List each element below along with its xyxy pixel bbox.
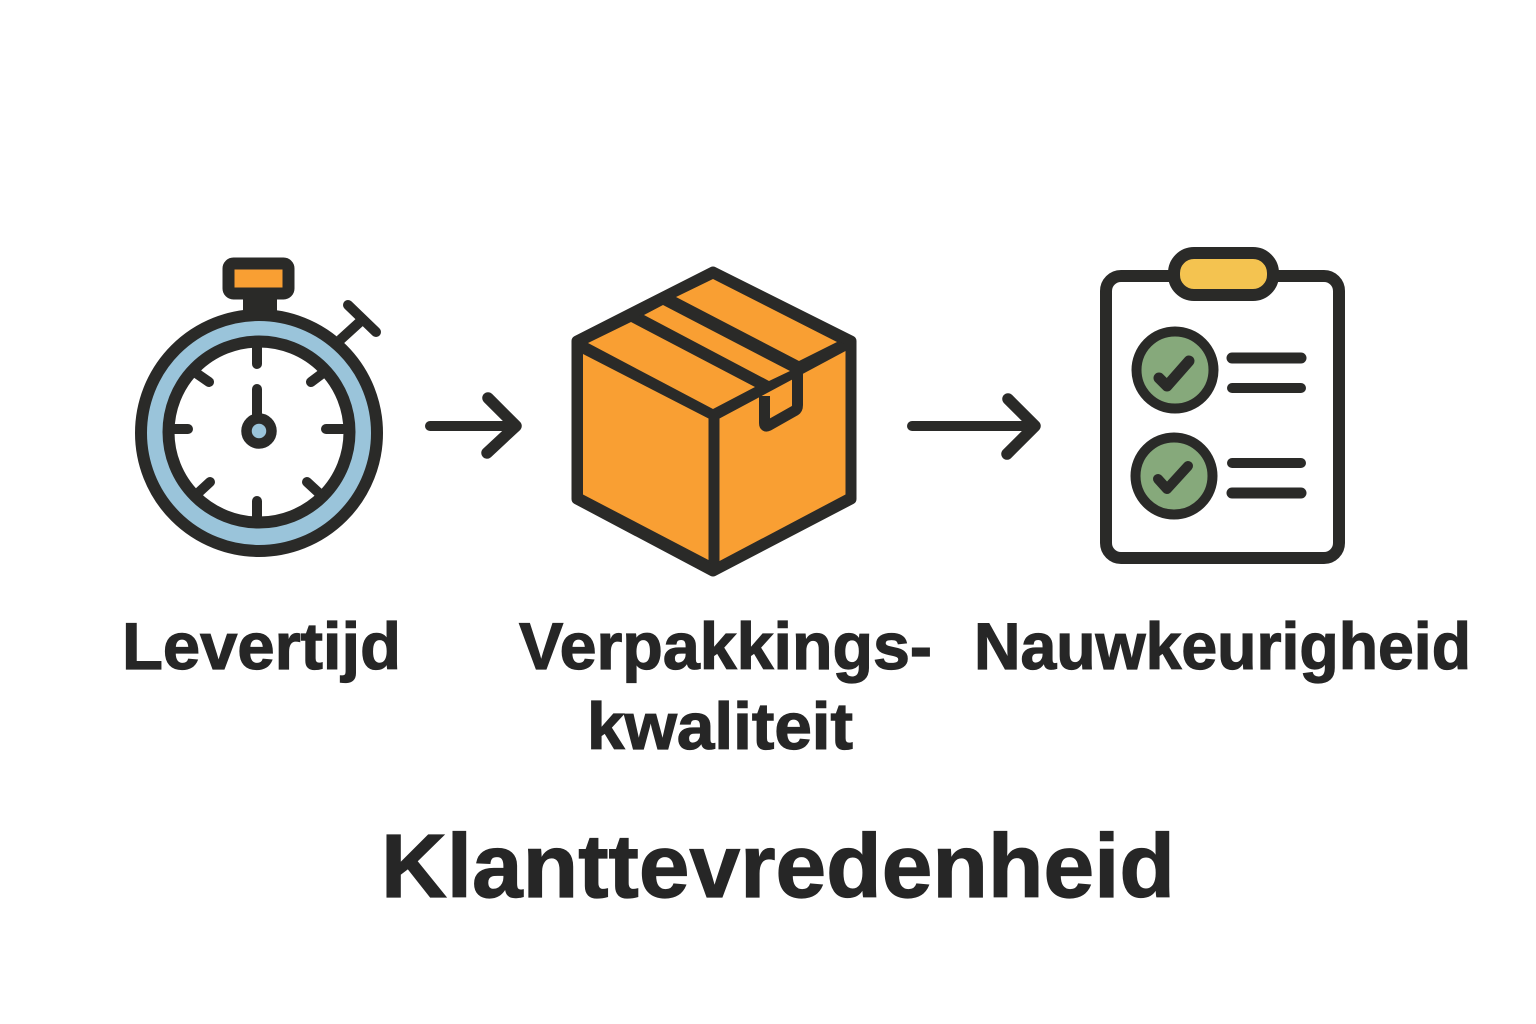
stopwatch blue ring <box>141 315 377 551</box>
arrow: first <box>430 398 516 453</box>
first item lines <box>1232 358 1301 388</box>
label: Verpakkingskwaliteit <box>519 609 932 763</box>
clipboard board <box>1106 276 1339 558</box>
box right face <box>720 351 846 561</box>
arrow: second <box>912 399 1035 454</box>
box top flap left <box>588 322 755 409</box>
icon: stopwatch <box>141 264 377 551</box>
stopwatch ticks <box>174 346 343 518</box>
label: Nauwkeurigheid: Nauwkeurigheid <box>974 609 1471 683</box>
stopwatch top button <box>228 264 288 314</box>
icon: clipboard checklist <box>1106 253 1339 558</box>
stopwatch side button <box>340 305 376 340</box>
icon: package box <box>577 272 851 571</box>
label: Verpakkingskwaliteit: Verpakkings- <box>519 609 932 683</box>
box silhouette <box>577 272 851 571</box>
clipboard clip <box>1174 253 1273 295</box>
box left face <box>583 354 708 560</box>
label: Verpakkingskwaliteit: kwaliteit <box>587 689 853 763</box>
box tape tab <box>764 372 798 426</box>
box top flap right <box>676 279 837 361</box>
title: Klanttevredenheid: Klanttevredenheid <box>381 817 1175 917</box>
first check circle <box>1136 332 1214 408</box>
stopwatch hand and hub <box>246 389 272 444</box>
label: Levertijd: Levertijd <box>122 609 401 683</box>
second check circle <box>1136 438 1212 514</box>
second item lines <box>1232 463 1301 493</box>
box tape <box>644 305 790 381</box>
